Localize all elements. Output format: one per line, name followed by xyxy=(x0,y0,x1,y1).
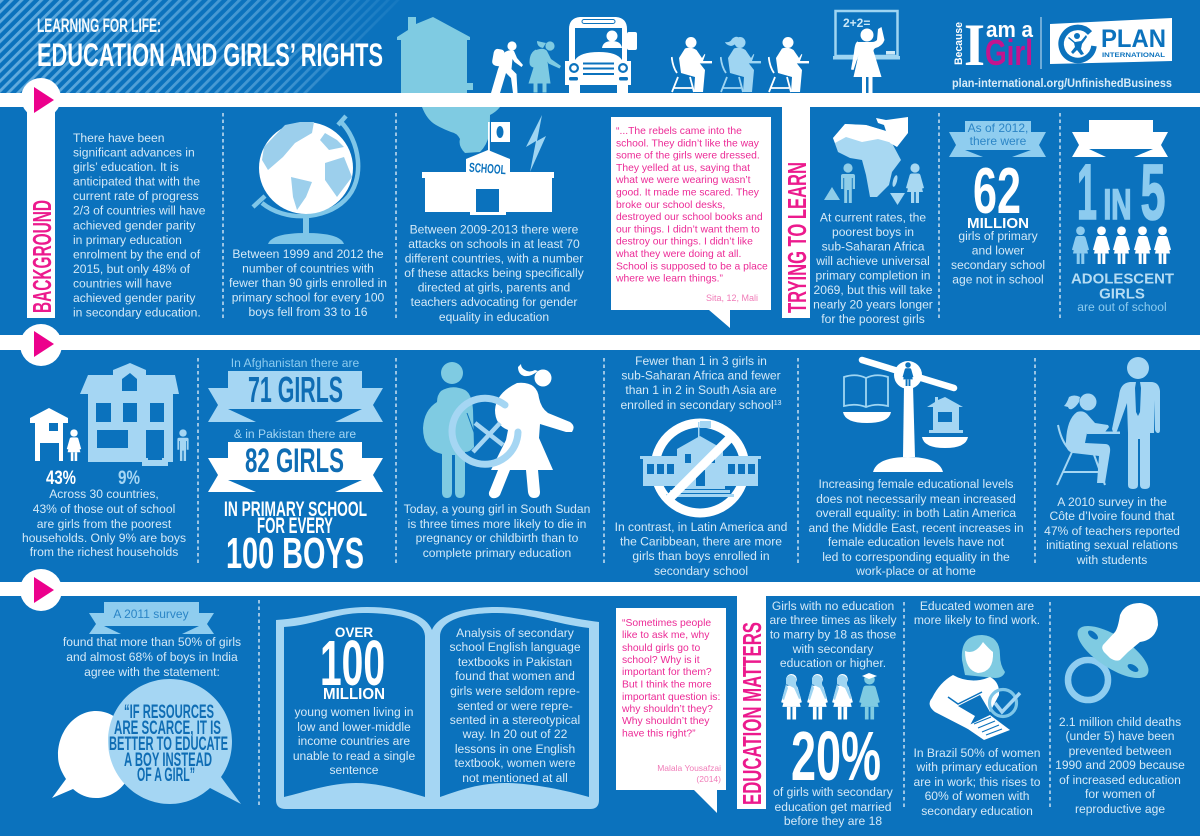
arrow: section two xyxy=(34,331,54,357)
text: latin america: In contrast, in Latin America and xyxy=(615,520,787,534)
text: brazil: 60% of women with xyxy=(925,789,1029,803)
text: South Sudan: complete primary education xyxy=(423,546,571,560)
text: adolescent girls xyxy=(1071,270,1174,314)
heading: in primary school for every 100 boys: IN PRIMARY SCHOOL xyxy=(224,498,367,521)
website url: plan-international.org/UnfinishedBusiness xyxy=(952,76,1172,90)
text: background intro: in secondary education. xyxy=(73,306,201,320)
icon: school bus xyxy=(565,17,637,93)
text: sub-Saharan completion xyxy=(813,210,933,326)
quote: if resources are scarce xyxy=(109,702,228,786)
text: secondary enrolment: than 1 in 2 in South Asia are xyxy=(625,383,777,397)
text: secondary enrolment: Fewer than 1 in 3 girls in xyxy=(635,354,767,368)
text: countries with fewer girls: Between 1999 and 2012 the xyxy=(232,247,384,261)
logo: because I am a girl: I xyxy=(964,12,985,78)
section label: background: BACKGROUND xyxy=(27,200,57,313)
text: South Sudan xyxy=(404,502,590,560)
stat: over 100 million: OVER xyxy=(335,625,373,640)
text: in Pakistan: & in Pakistan there are xyxy=(234,427,356,441)
text: attacks on schools: directed at girls, parents and xyxy=(418,280,570,294)
quote: Sita: school. They didn’t like the way xyxy=(616,138,760,149)
text: before they are 18 xyxy=(773,785,894,828)
stat: 1 in 5: IN xyxy=(1104,181,1132,229)
icon: globe xyxy=(253,116,358,244)
text: marry by 18: are three times as likely xyxy=(769,613,897,627)
text: background intro: anticipated that with the xyxy=(73,175,200,189)
speech bubbles xyxy=(52,679,241,804)
stat: 1 in 5 xyxy=(1077,147,1166,236)
text: attacks on schools: different countries, with a number xyxy=(405,252,583,266)
logo: plan international: INTERNATIONAL xyxy=(1102,52,1165,59)
book left page xyxy=(284,613,425,797)
text: unable to read: low and lower-middle xyxy=(297,720,411,734)
text: textbooks in Pakistan: girls were seldom repre- xyxy=(450,684,580,698)
quote: Malala: But I think the more xyxy=(622,680,712,690)
text: background intro: achieved gender parity xyxy=(73,291,196,305)
logo: because I am a girl: am a xyxy=(986,17,1034,42)
text: attacks on schools: attacks on schools in at least 70 xyxy=(408,237,580,251)
text: poorest households: 43% of those out of school xyxy=(33,502,175,516)
heading: in primary school for every 100 boys xyxy=(224,498,367,578)
text: background intro: girls’ education. It is xyxy=(73,160,179,174)
quote: Sita xyxy=(611,117,771,328)
icon: five girls xyxy=(1072,226,1171,264)
text: textbooks in Pakistan: textbook, women were xyxy=(454,756,576,770)
text: attacks on schools xyxy=(404,222,585,324)
text: child deaths: reproductive age xyxy=(1075,802,1165,816)
text: more likely to find work: Educated women are xyxy=(920,599,1034,613)
text: secondary enrolment: sub-Saharan Africa and fewer xyxy=(621,368,781,382)
text: female educational levels: female education levels have not xyxy=(828,535,1005,549)
text: female educational levels xyxy=(808,477,1024,578)
stat: 62 million: secondary school xyxy=(951,258,1045,272)
header stripes xyxy=(0,0,400,93)
quote: Sita: They yelled at us, saying that xyxy=(616,163,750,174)
quote: Sita: good. It made me scared. They xyxy=(616,188,760,198)
text: sub-Saharan completion: poorest boys in xyxy=(832,225,914,239)
quote: Malala: have this right?” xyxy=(622,728,696,740)
quote: if resources are scarce: ARE SCARCE, IT IS xyxy=(114,718,221,739)
text: brazil: In Brazil 50% of women xyxy=(913,746,1041,760)
text: brazil: with primary education xyxy=(916,760,1038,774)
text: countries with fewer girls: number of countries with xyxy=(242,262,374,276)
text: marry by 18: education or higher. xyxy=(780,656,886,670)
heading: in primary school for every 100 boys: 100 BOYS xyxy=(226,529,364,578)
text: background intro: current rate of progress xyxy=(73,189,199,203)
text: latin america: the Caribbean, there are more xyxy=(620,534,782,548)
section label: trying to learn: TRYING TO LEARN xyxy=(782,162,812,313)
text: sub-Saharan completion: At current rates, the xyxy=(820,210,926,224)
text: secondary enrolment: 13 xyxy=(774,400,782,407)
text: countries with fewer girls: fewer than 90 girls enrolled in xyxy=(229,276,387,290)
title: LEARNING FOR LIFE: xyxy=(37,16,161,37)
text: india survey: found that more than 50% of girls xyxy=(63,635,241,649)
text: brazil: secondary education xyxy=(921,804,1033,818)
quote: Sita: broke our school desks, xyxy=(616,200,725,211)
text: child deaths: of increased education xyxy=(1059,773,1181,787)
text: sub-Saharan completion: sub-Saharan Africa xyxy=(822,240,925,254)
icon: prohibited school xyxy=(640,421,761,513)
logo: because I am a girl xyxy=(953,12,1034,78)
text: more likely to find work: more likely to find work. xyxy=(914,613,1040,627)
ribbon: 71 girls xyxy=(208,369,383,422)
section label: education matters: EDUCATION MATTERS xyxy=(737,622,767,805)
text: textbooks in Pakistan: textbooks in Pakistan xyxy=(458,655,572,669)
text: unable to read: income countries are xyxy=(298,734,410,748)
text: background intro: 2015, but only 48% of xyxy=(73,262,191,276)
text: attacks on schools: Between 2009-2013 there were xyxy=(410,222,579,236)
text: poorest households xyxy=(22,487,186,559)
title: EDUCATION AND GIRLS’ RIGHTS xyxy=(37,37,383,73)
stat: 62 million: girls of primary xyxy=(958,229,1039,243)
text: female educational levels: overall equality: in both Latin America xyxy=(816,506,1016,520)
ribbon: as of 2012: there were xyxy=(970,134,1027,148)
quote: if resources are scarce: OF A GIRL” xyxy=(137,765,195,786)
quote: Sita: some of the girls were dressed. xyxy=(616,151,760,162)
ribbon: 82 girls xyxy=(208,442,383,492)
quote: Malala: important question is: xyxy=(622,692,720,703)
text: child deaths: 1990 and 2009 because xyxy=(1055,758,1185,772)
stat: 62 million: MILLION xyxy=(967,215,1029,232)
text: unable to read: sentence xyxy=(329,763,379,777)
quote: Malala xyxy=(616,608,726,813)
arrow: background xyxy=(34,87,54,113)
ribbon: 82 girls: 82 GIRLS xyxy=(245,442,344,480)
quote: Malala: Malala Yousafzai xyxy=(657,763,721,773)
icon: four girls xyxy=(781,673,880,720)
icon: teacher at blackboard: 2+2= xyxy=(843,16,870,30)
text: unable to read xyxy=(293,705,415,777)
stat: over 100 million xyxy=(320,625,385,703)
text: South Sudan: pregnancy or childbirth than to xyxy=(416,531,579,545)
text: attacks on schools: equality in education xyxy=(439,310,549,324)
text: cote d'ivoire: 47% of teachers reported xyxy=(1044,524,1180,538)
text: sub-Saharan completion: 2069, but this will take xyxy=(814,283,933,297)
text: textbooks in Pakistan: sented in a stereotypical xyxy=(450,713,580,727)
dividers xyxy=(198,113,1060,807)
quote: Malala: Why shouldn’t they xyxy=(622,716,710,727)
icon: open book xyxy=(276,607,599,809)
ribbon: 71 girls: 71 GIRLS xyxy=(248,369,343,410)
text: female educational levels: work-place or at home xyxy=(855,564,976,578)
quote: Malala: why shouldn’t they? xyxy=(621,704,713,715)
text: child deaths: for women of xyxy=(1085,787,1156,801)
stat: 62 million xyxy=(951,154,1045,286)
text: marry by 18 xyxy=(769,599,897,670)
text: child deaths xyxy=(1055,715,1185,816)
text: marry by 18: to marry by 18 as those xyxy=(770,628,896,642)
text: attacks on schools: teachers advocating for gender xyxy=(411,295,577,309)
text: unable to read: unable to read a single xyxy=(293,749,415,763)
text: background intro: 2/3 of countries will have xyxy=(73,204,206,218)
text: before they are 18: before they are 18 xyxy=(784,814,882,828)
quote: Malala: “Sometimes people xyxy=(622,618,711,629)
quote: Sita: destroy our things. I didn’t like xyxy=(616,237,753,248)
text: female educational levels: does not necessarily mean increased xyxy=(816,492,1016,506)
text: secondary enrolment: enrolled in secondary school xyxy=(620,398,774,412)
text: latin america xyxy=(615,520,787,578)
icon: attacked school: SCHOOL xyxy=(468,160,506,177)
quote: Malala: important for them? xyxy=(622,667,712,678)
stat: 1 in 5: 1 xyxy=(1077,147,1097,236)
text: unable to read: young women living in xyxy=(294,705,414,719)
stat: 43% and 9%: 9% xyxy=(118,468,140,489)
text: female educational levels: Increasing female educational levels xyxy=(819,477,1013,491)
text: marry by 18: Girls with no education xyxy=(772,599,894,613)
text: child deaths: (under 5) have been xyxy=(1066,729,1174,743)
quote: Sita: Sita, 12, Mali xyxy=(706,293,758,303)
text: more likely to find work xyxy=(914,599,1040,627)
quote: Sita: our things. I didn’t want them to xyxy=(616,224,760,235)
ribbon: as of 2012 xyxy=(949,121,1046,157)
text: background intro: There have been xyxy=(73,131,164,145)
text: textbooks in Pakistan: sented or were repre- xyxy=(457,699,573,713)
text: sub-Saharan completion: for the poorest girls xyxy=(821,312,925,326)
stat: 1 in 5: 5 xyxy=(1140,147,1166,236)
text: india survey: agree with the statement: xyxy=(84,665,220,679)
text: countries with fewer girls: primary school for every 100 xyxy=(232,291,385,305)
text: child deaths: 2.1 million child deaths xyxy=(1059,715,1181,729)
text: cote d'ivoire xyxy=(1044,495,1180,567)
icon: boy walking xyxy=(491,41,523,93)
ribbon: 2011 survey: A 2011 survey xyxy=(113,607,189,621)
text: textbooks in Pakistan: lessons in one English xyxy=(455,742,575,756)
icon: pregnant woman and girl xyxy=(423,362,574,498)
text: latin america: secondary school xyxy=(654,564,748,578)
ribbon: 2011 survey xyxy=(89,602,214,634)
icon: students at desks xyxy=(672,37,809,92)
quote: Malala: school? Why is it xyxy=(622,655,700,666)
text: background intro: enrolment by the end of xyxy=(73,247,201,261)
icon: pacifier xyxy=(1068,603,1158,700)
icon: africa map with figures xyxy=(824,117,924,205)
text: background intro: achieved gender parity xyxy=(73,218,196,232)
text: poorest households: households. Only 9% are boys xyxy=(22,531,186,545)
text: child deaths: prevented between xyxy=(1069,744,1171,758)
text: background intro xyxy=(73,131,206,320)
book right page xyxy=(440,613,589,797)
text: countries with fewer girls: boys fell from 33 to 16 xyxy=(249,305,368,319)
text: adolescent girls: GIRLS xyxy=(1099,286,1145,302)
text: poorest households: from the richest households xyxy=(30,545,178,559)
icon: girl walking xyxy=(528,41,561,92)
stat: 62 million: 62 xyxy=(973,154,1021,227)
text: attacks on schools: of these attacks being specifically xyxy=(404,266,585,280)
text: before they are 18: of girls with secondary xyxy=(773,785,894,799)
logo: because I am a girl: Girl xyxy=(985,32,1033,73)
text: poorest households: are girls from the poorest xyxy=(37,517,172,531)
heading: in primary school for every 100 boys: FOR EVERY xyxy=(257,513,333,538)
text: textbooks in Pakistan xyxy=(449,626,581,785)
stat: over 100 million: 100 xyxy=(320,627,385,699)
text: poorest households: Across 30 countries, xyxy=(49,487,159,501)
text: textbooks in Pakistan: school English language xyxy=(449,640,581,654)
quote: Sita: School is supposed to be a place xyxy=(616,261,768,272)
quote: Malala: like to ask me, why xyxy=(622,630,710,641)
text: sub-Saharan completion: will achieve universal xyxy=(815,254,930,268)
icon: scales with book and house xyxy=(843,360,968,472)
icon: houses rich and poor xyxy=(30,363,189,466)
logo divider xyxy=(1040,17,1042,69)
text: secondary enrolment xyxy=(620,354,782,412)
quote: Sita: destroyed our school books and xyxy=(616,212,763,223)
text: brazil: are in work; this rises to xyxy=(913,775,1041,789)
text: india survey xyxy=(63,635,241,679)
quote: if resources are scarce: “IF RESOURCES xyxy=(124,702,214,723)
stat: 20%: 20% xyxy=(791,717,881,795)
quote: if resources are scarce: A BOY INSTEAD xyxy=(124,750,212,771)
logo: because I am a girl: Because xyxy=(953,22,965,65)
stat: 43% and 9%: 43% xyxy=(46,468,76,489)
text: textbooks in Pakistan: Analysis of secondary xyxy=(456,626,575,640)
text: background intro: significant advances in xyxy=(73,146,195,160)
text: adolescent girls: are out of school xyxy=(1077,300,1167,314)
text: latin america: girls than boys enrolled in xyxy=(632,549,770,563)
stat: 62 million: and lower xyxy=(972,244,1024,258)
text: cote d'ivoire: A 2010 survey in the xyxy=(1057,495,1167,509)
text: sub-Saharan completion: primary completion in xyxy=(816,268,930,282)
text: South Sudan: Today, a young girl in South Sudan xyxy=(404,502,590,516)
text: sub-Saharan completion: nearly 20 years longer xyxy=(813,298,933,312)
logo: plan international: PLAN xyxy=(1101,25,1166,53)
text: in Afghanistan: In Afghanistan there are xyxy=(231,356,359,370)
text: female educational levels: led to corresponding equality in the xyxy=(822,550,1010,564)
quote: Sita: what we were wearing wasn’t xyxy=(615,175,751,186)
icon: attacked school xyxy=(422,115,554,215)
text: background intro: in primary education xyxy=(73,233,182,247)
quote: Sita: what they were doing at all. xyxy=(615,249,741,260)
text: cote d'ivoire: with students xyxy=(1076,553,1147,567)
quote: Sita: “...The rebels came into the xyxy=(616,126,742,137)
text: South Sudan: is three times more likely to die in xyxy=(408,517,586,531)
text: female educational levels: and the Middle East, recent increases in xyxy=(808,521,1024,535)
text: brazil xyxy=(913,746,1041,818)
text: textbooks in Pakistan: found that women and xyxy=(455,669,575,683)
quote: Sita: where we learn things.” xyxy=(615,274,723,285)
quote: if resources are scarce: BETTER TO EDUCATE xyxy=(109,734,228,755)
text: adolescent girls: ADOLESCENT xyxy=(1071,270,1174,288)
text: textbooks in Pakistan: not mentioned at all xyxy=(462,771,568,785)
text: cote d'ivoire: Côte d’Ivoire found that xyxy=(1049,509,1175,523)
icon: woman writing xyxy=(930,635,1020,740)
text: textbooks in Pakistan: way. In 20 out of 22 xyxy=(462,727,568,741)
text: india survey: and almost 68% of boys in India xyxy=(66,650,238,664)
stat: 62 million: age not in school xyxy=(952,272,1044,286)
icon: house and smoke xyxy=(397,17,500,153)
stat: over 100 million: MILLION xyxy=(323,686,385,703)
logo: plan international xyxy=(1050,18,1172,64)
quote: Malala: should girls go to xyxy=(622,643,700,654)
stat: 43% and 9% xyxy=(46,468,140,489)
text: before they are 18: education get married xyxy=(775,800,891,814)
icon: teacher at blackboard xyxy=(833,11,900,93)
text: background intro: countries will have xyxy=(73,276,172,290)
text: marry by 18: with secondary xyxy=(792,642,874,656)
text: countries with fewer girls xyxy=(229,247,387,319)
text: cote d'ivoire: initiating sexual relations xyxy=(1046,538,1178,552)
arrow: section three xyxy=(34,577,54,603)
icon: teacher and student xyxy=(1057,357,1160,489)
ribbon: as of 2012: As of 2012, xyxy=(968,121,1028,135)
title xyxy=(37,16,383,73)
ribbon: blank white xyxy=(1072,120,1168,157)
quote: Malala: (2014) xyxy=(696,774,721,784)
